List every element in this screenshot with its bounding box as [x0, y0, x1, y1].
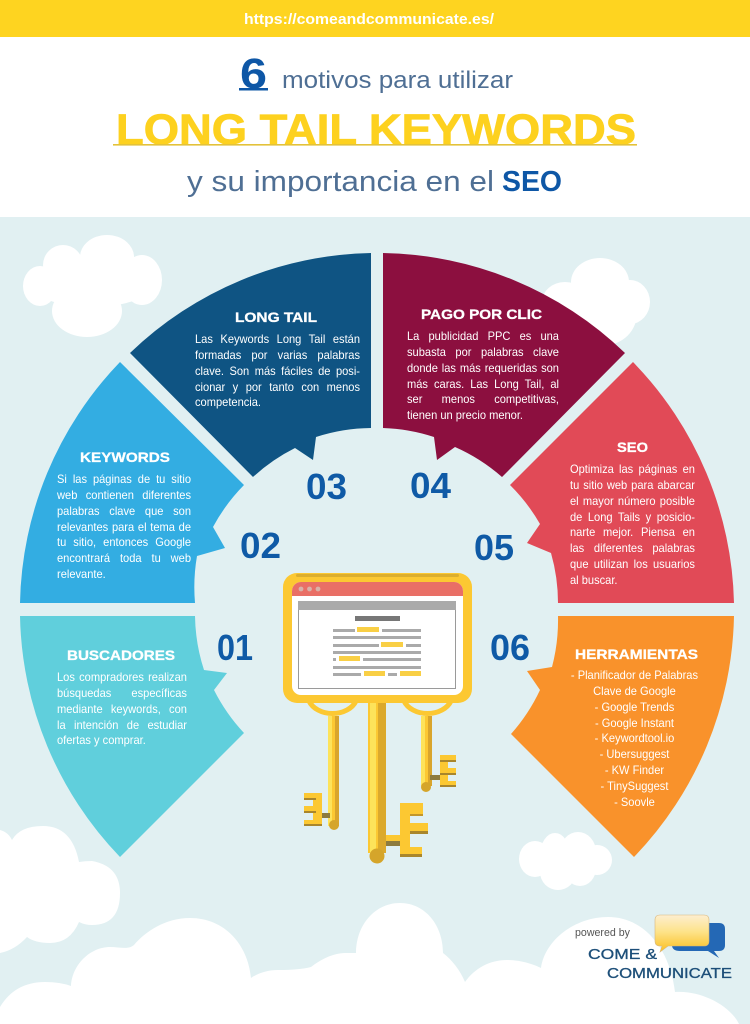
- icon: left key: [304, 701, 356, 830]
- panel: herramientas (06): - Keywordtool.io: [595, 731, 674, 745]
- panel: keywords (02): Si las páginas de tu sitio: [57, 472, 191, 486]
- number 05: 05: [474, 527, 514, 568]
- panel: seo (05): tu sitio web para abarcar: [570, 478, 695, 492]
- panel: keywords (02): web contienen diferentes: [57, 488, 191, 502]
- panel: pago por clic (04): subasta por palabras clave: [407, 345, 559, 359]
- panel: seo (05): que utilizan los usuarios: [570, 557, 695, 571]
- panel: keywords (02): KEYWORDS: [80, 449, 170, 465]
- cloud: top right: [542, 258, 650, 345]
- subtitle: y su importancia en el SEO: SEO: [502, 166, 562, 198]
- panel: pago por clic (04): donde las más requeridas son: [407, 361, 559, 375]
- panel: keywords (02): palabras clave que son: [57, 504, 191, 518]
- panel: buscadores (01): la intención de estudiar: [57, 718, 187, 732]
- panel: herramientas (06): - TinySuggest: [601, 779, 668, 793]
- panel: herramientas (06): HERRAMIENTAS: [575, 646, 698, 662]
- panel: herramientas (06): - Ubersuggest: [600, 747, 669, 761]
- panel: long tail (03): cionar y por tanto con menos: [195, 380, 360, 394]
- header: white title band: [0, 37, 750, 217]
- top bar with URL: https://comeandcommunicate.es/: [244, 11, 495, 28]
- title line: 6 motivos para utilizar: motivos para utilizar: [282, 67, 513, 94]
- panel: seo (05): al buscar.: [570, 573, 618, 587]
- panel: pago por clic (04): más caras. Las Long Tail, al: [407, 377, 559, 391]
- panel: herramientas (06): Clave de Google: [593, 684, 676, 698]
- panel: herramientas (06): - Google Instant: [595, 716, 674, 730]
- panel: herramientas (06): - Soovle: [614, 795, 655, 809]
- panel: pago por clic (04): [383, 253, 625, 477]
- browser window: [283, 573, 472, 703]
- section numbers: [217, 465, 530, 665]
- icon: right key: [404, 701, 456, 792]
- panel: keywords (02): relevante.: [57, 567, 106, 581]
- panel: buscadores (01): mediante keywords, con: [57, 702, 187, 716]
- panel: seo (05): el mayor número posible: [570, 494, 695, 508]
- panel: buscadores (01): Los compradores realizan: [57, 670, 187, 684]
- panel: keywords (02): encontrará toda tu web: [57, 551, 191, 565]
- wordmark: COME &: [588, 947, 657, 963]
- panel: herramientas (06): [511, 616, 734, 857]
- cloud: bottom band: [0, 903, 739, 1024]
- panel: buscadores (01): [20, 616, 244, 857]
- panel: long tail (03): LONG TAIL: [235, 309, 317, 325]
- icon: centre key: [368, 703, 428, 864]
- panel: long tail (03): formadas por varias palabras: [195, 348, 360, 362]
- panel: long tail (03): competencia.: [195, 395, 261, 409]
- powered by text: powered by: [575, 927, 630, 939]
- panel: pago por clic (04): ser menos competitivas,: [407, 392, 559, 406]
- title line: 6 motivos para utilizar: 6: [240, 50, 267, 98]
- number 04: 04: [410, 465, 451, 506]
- panel: buscadores (01): BUSCADORES: [67, 647, 175, 663]
- panel: herramientas (06): - Google Trends: [595, 700, 674, 714]
- panel: seo (05): de Long Tails y posicio-: [570, 510, 695, 524]
- panel: buscadores (01): búsquedas específicas: [57, 686, 187, 700]
- title: LONG TAIL KEYWORDS: LONG TAIL KEYWORDS: [116, 106, 636, 154]
- top bar with URL: [0, 0, 750, 37]
- panel: seo (05): narte mejor. Piensa en: [570, 525, 695, 539]
- icon: chat bubbles: [655, 915, 725, 958]
- panel: pago por clic (04): PAGO POR CLIC: [421, 306, 542, 322]
- title line: 6 motivos para utilizar: [239, 50, 513, 98]
- panel: herramientas (06): - Planificador de Palabras: [571, 668, 698, 682]
- subtitle: y su importancia en el SEO: y su importancia en el: [187, 166, 494, 198]
- panel: keywords (02): tu sitio, entonces Google: [57, 535, 191, 549]
- wordmark: [588, 947, 732, 982]
- logo: powered by Come & Communicate: [575, 914, 732, 982]
- wordmark: COMMUNICATE: [607, 966, 732, 982]
- panel: seo (05): Optimiza las páginas en: [570, 462, 695, 476]
- cloud: middle left: [0, 826, 120, 953]
- panel: keywords (02): relevantes para el tema de: [57, 520, 191, 534]
- panel: long tail (03): clave. Son más fáciles de posi-: [195, 364, 360, 378]
- panel: seo (05): SEO: [617, 439, 648, 455]
- panel: long tail (03): Las Keywords Long Tail están: [195, 332, 360, 346]
- number 03: 03: [306, 466, 347, 507]
- illustration: browser window with three golden keys: [283, 573, 472, 864]
- cloud: small right: [519, 832, 612, 890]
- panel: pago por clic (04): tienen un precio menor.: [407, 408, 523, 422]
- panel: long tail (03): [130, 253, 371, 477]
- number 02: 02: [240, 525, 281, 566]
- panel: herramientas (06): - KW Finder: [605, 763, 664, 777]
- panel: seo (05): [510, 362, 734, 603]
- cloud: top left: [23, 235, 162, 337]
- panel: pago por clic (04): La publicidad PPC es una: [407, 329, 559, 343]
- panel: seo (05): las diferentes palabras: [570, 541, 695, 555]
- panel: buscadores (01): ofertas y comprar.: [57, 733, 146, 747]
- panel: keywords (02): [20, 362, 244, 603]
